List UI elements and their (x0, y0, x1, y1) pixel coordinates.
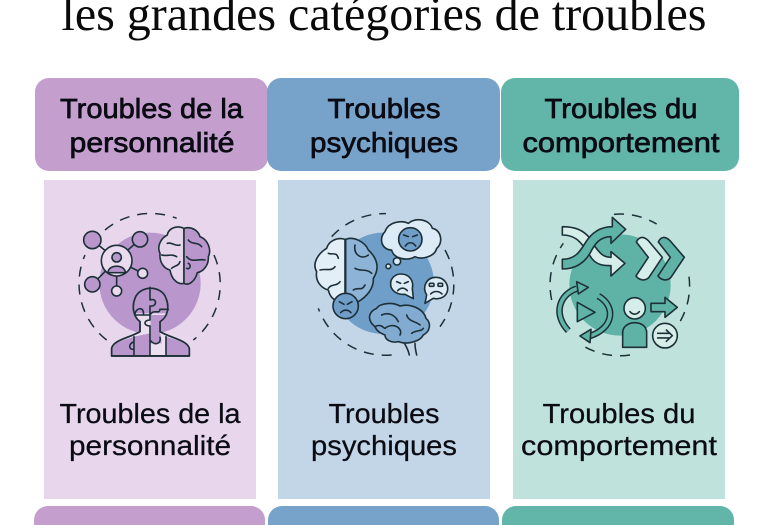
label: troubles de la personnalité: personnalité (69, 430, 231, 461)
footer bar: blue (268, 506, 499, 525)
header: troubles de la personnalité (35, 78, 268, 171)
refresh arrows (560, 282, 610, 343)
label: troubles psychiques: psychiques (311, 430, 457, 461)
label: troubles du comportement: Troubles du (542, 398, 696, 429)
header: troubles du comportement: Troubles du (544, 93, 698, 124)
header: troubles de la personnalité: personnalité (70, 127, 234, 158)
icon: network, brain and puzzle head (79, 213, 220, 356)
label: troubles de la personnalité: Troubles de la (60, 398, 241, 429)
label: troubles psychiques (311, 398, 457, 461)
icon: brains and sad faces (315, 214, 454, 355)
header: troubles psychiques: Troubles (328, 93, 440, 124)
label: troubles psychiques: Troubles (328, 398, 440, 429)
footer bar: purple (34, 506, 265, 525)
header: troubles psychiques (267, 78, 500, 171)
puzzle figure (112, 287, 189, 356)
panel: comportement (513, 180, 725, 499)
label: troubles de la personnalité (60, 398, 241, 461)
icon: arrows and person (550, 214, 690, 356)
header: troubles du comportement (501, 78, 739, 171)
header: troubles du comportement: comportement (522, 127, 720, 158)
panel: personnalité (44, 180, 256, 499)
header: troubles de la personnalité: Troubles de la (60, 93, 243, 124)
panel: psychiques (278, 180, 490, 499)
label: troubles du comportement (521, 398, 717, 461)
header: troubles psychiques: psychiques (310, 127, 458, 158)
footer bar: green (502, 506, 734, 525)
label: troubles du comportement: comportement (521, 430, 717, 461)
